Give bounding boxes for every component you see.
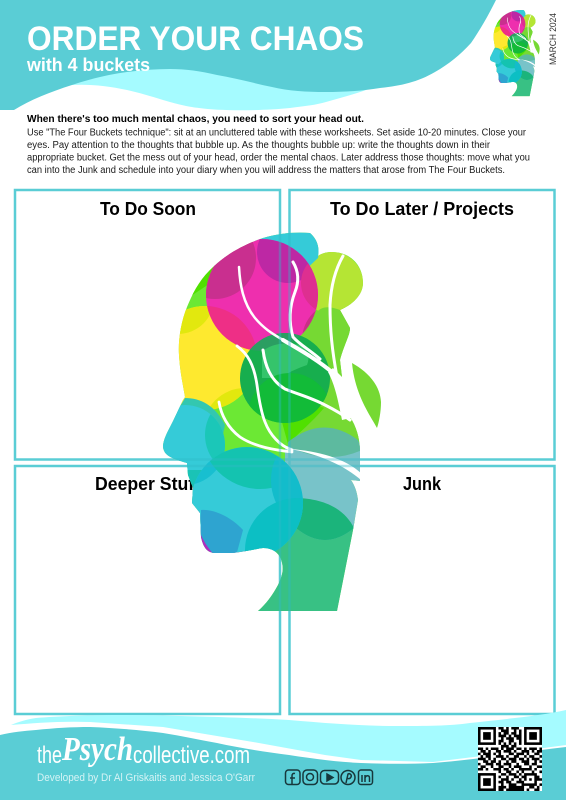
heading: junk: Junk — [403, 474, 442, 494]
heading: deeper stuff: Deeper Stuff — [95, 474, 201, 494]
heading: to do soon: To Do Soon — [100, 199, 196, 219]
logo: the Psych collective.com — [37, 731, 250, 769]
icon: facebook — [286, 770, 300, 784]
logo: the Psych collective.com: Psych — [61, 731, 133, 768]
icon: youtube — [320, 770, 338, 784]
head illustration — [142, 217, 381, 625]
bucket grid — [15, 190, 554, 714]
icon: linkedin — [358, 770, 372, 784]
footer wave: light cyan — [11, 710, 566, 762]
heading: to do later: To Do Later / Projects — [330, 199, 514, 219]
grid lines showing through head — [204, 242, 360, 611]
footer wave: teal band — [0, 727, 566, 800]
title: ORDER YOUR CHAOS — [27, 20, 364, 58]
logo: the Psych collective.com: collective.com — [133, 742, 250, 769]
header wave: teal banner — [0, 0, 496, 110]
intro text: eyes. Pay attention to the thoughts that bubble up. As the thoughts bubble up: write the thoughts down in their — [27, 140, 491, 151]
panel: to do soon — [15, 190, 280, 460]
logo: the Psych collective.com: the — [37, 742, 62, 769]
icon: small head logo — [485, 6, 540, 99]
social icons — [286, 770, 372, 784]
QR code — [478, 727, 542, 791]
date label: MARCH 2024 — [548, 13, 558, 65]
icon: instagram — [303, 770, 318, 784]
developer credit: Developed by Dr Al Griskaitis and Jessica O'Garr — [37, 772, 255, 784]
intro text: When there's too much mental chaos, you need to sort your head out. — [27, 114, 364, 125]
subtitle: with 4 buckets — [26, 55, 150, 75]
icon: pinterest — [341, 770, 355, 784]
intro text: Use "The Four Buckets technique": sit at an uncluttered table with these worksheets. Set aside 10-20 minutes. Close your — [27, 128, 527, 138]
intro text: can into the Junk and schedule into your diary when you will address the matters that arose from The Four Buckets. — [27, 165, 505, 176]
intro text: appropriate bucket. Get the mess out of your head, order the mental chaos. Later address those thoughts: move what you — [27, 152, 530, 164]
panel: deeper stuff — [15, 466, 280, 714]
panel: to do later — [290, 190, 554, 460]
intro text — [27, 114, 530, 176]
panel: junk — [290, 466, 554, 714]
header wave: light cyan — [60, 60, 400, 110]
